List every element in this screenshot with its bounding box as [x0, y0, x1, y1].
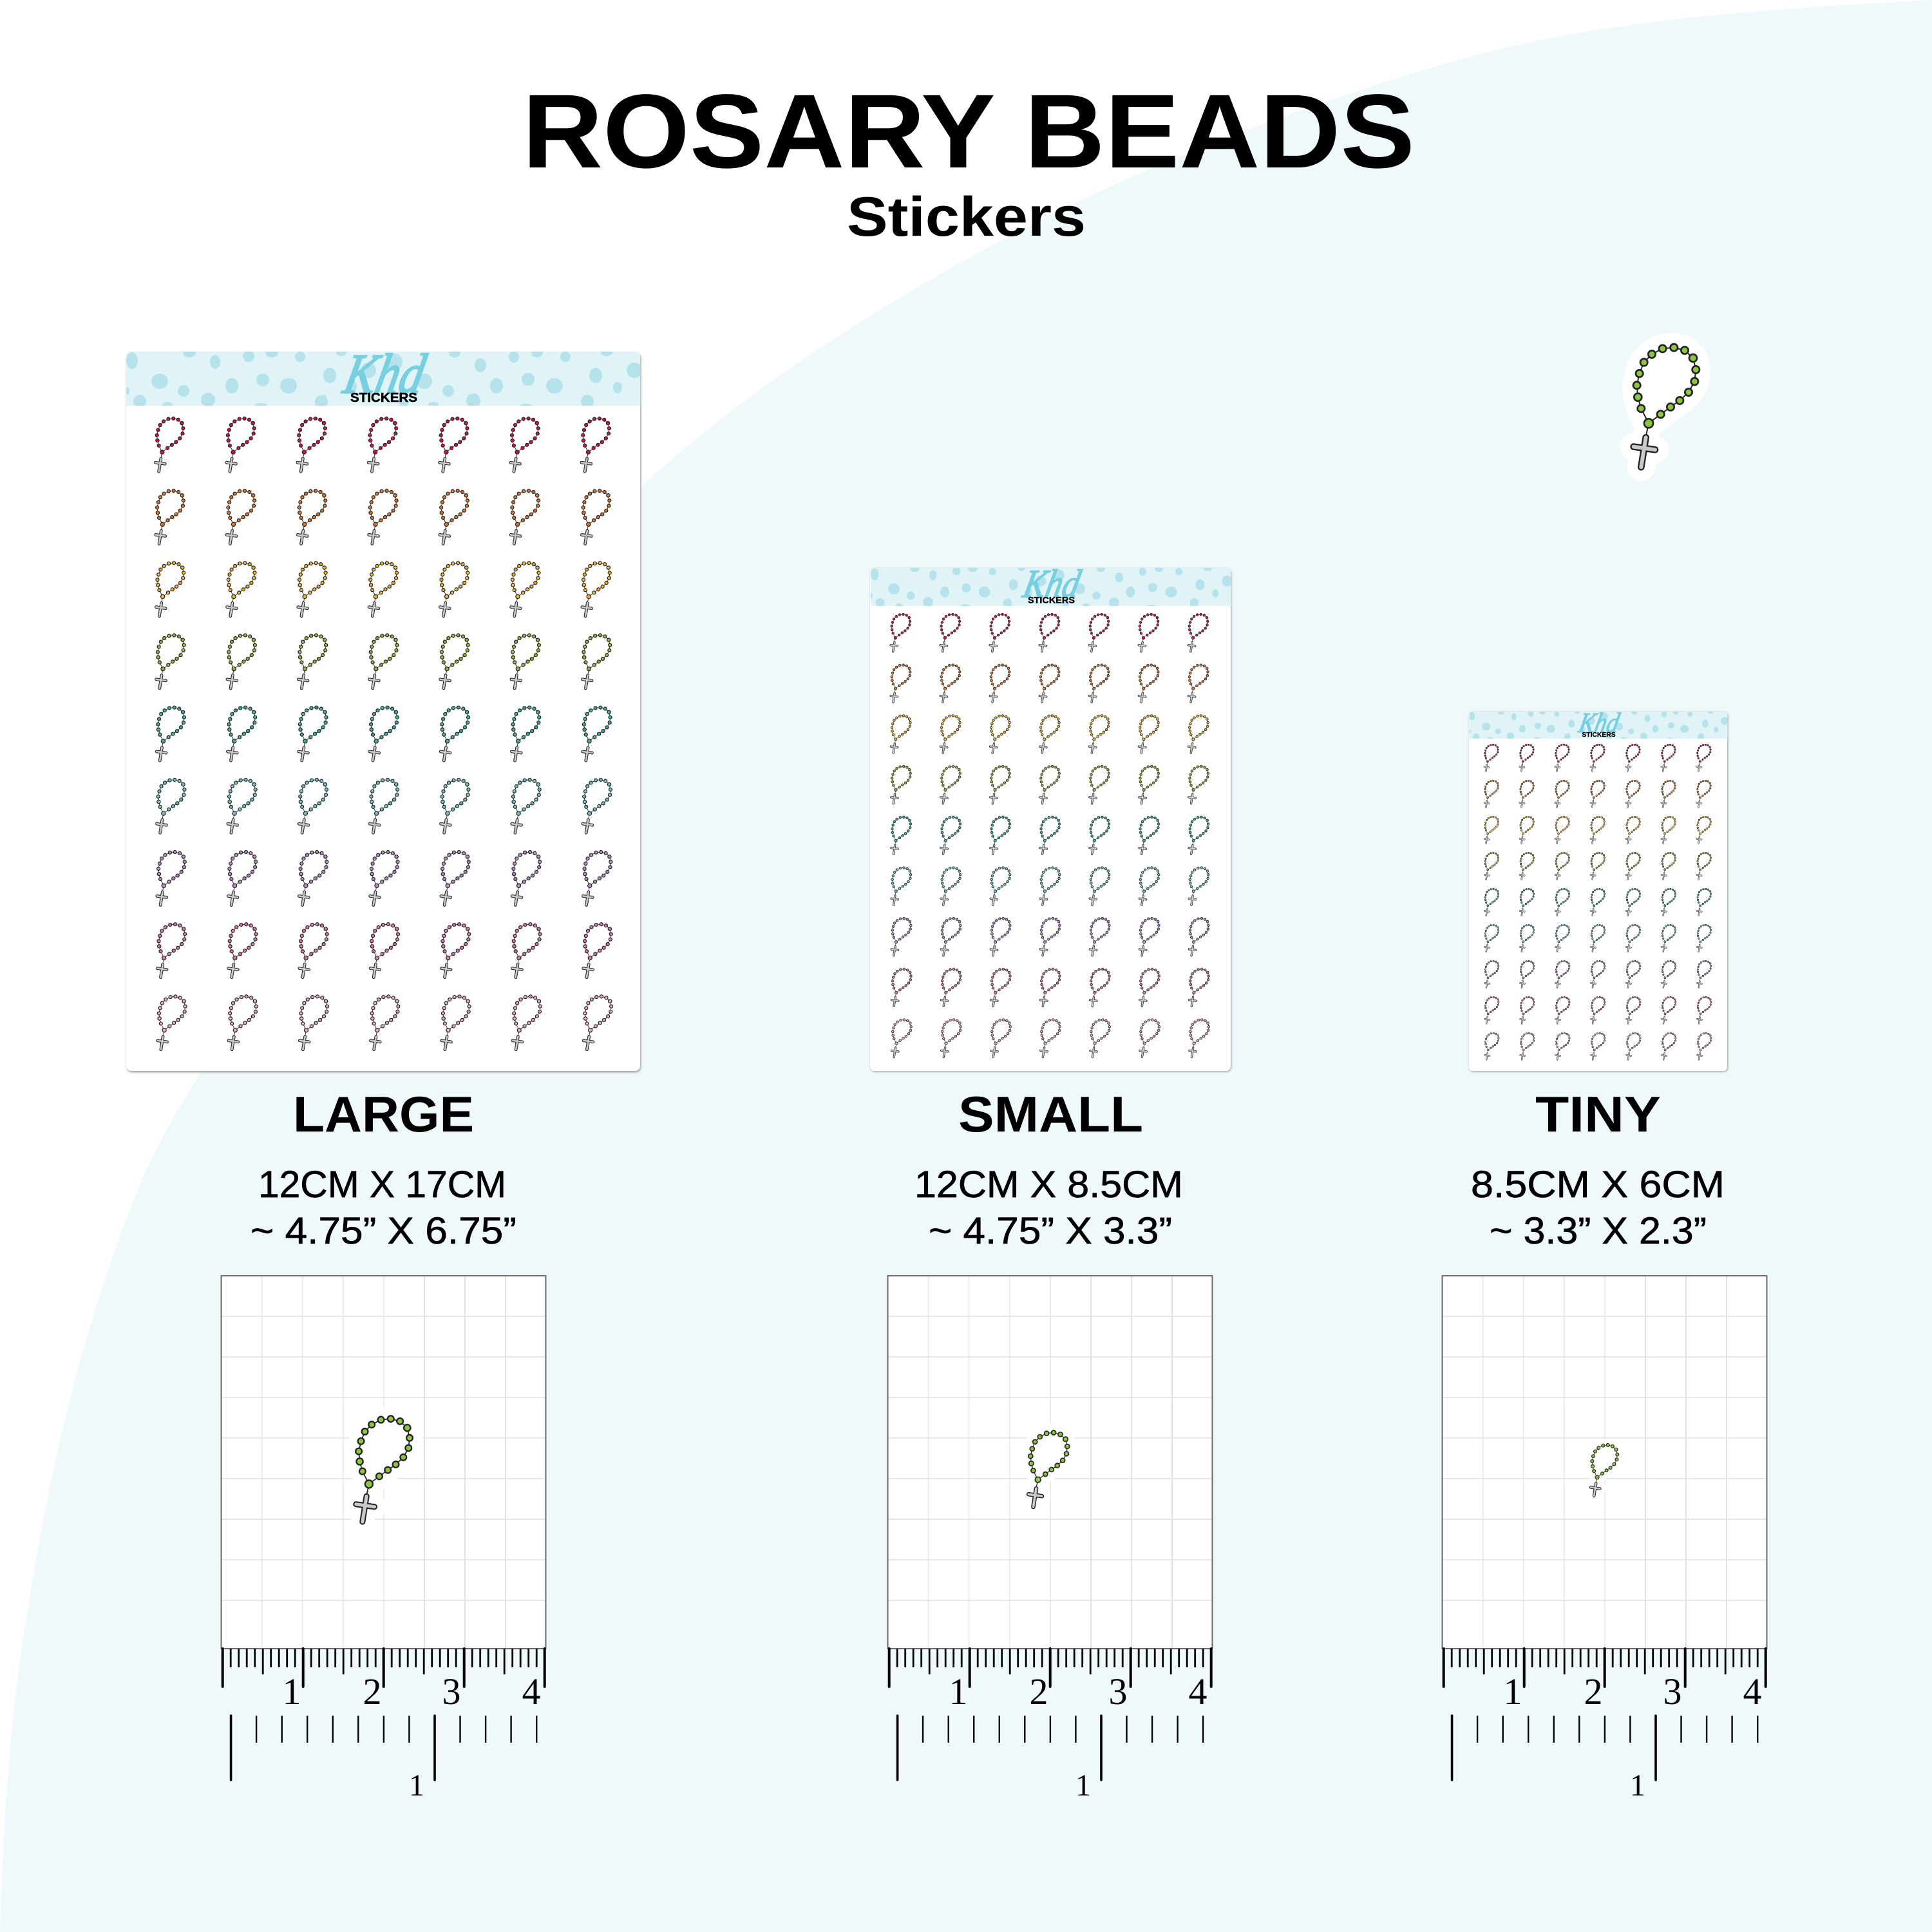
sheet header band with logo [870, 562, 1233, 609]
ruler numbers [1503, 1671, 1762, 1803]
ruler numbers: 2 [1029, 1671, 1048, 1712]
logo: Khd [1019, 562, 1084, 606]
sheet header band with logo [126, 343, 642, 410]
ruler numbers: 1 [949, 1671, 967, 1712]
rosary at large size [355, 1416, 413, 1522]
ruler numbers: 2 [1584, 1671, 1602, 1712]
ruler numbers: 3 [1663, 1671, 1682, 1712]
panel: tiny sticker sheet [1469, 707, 1728, 1072]
ruler numbers: 3 [442, 1671, 461, 1712]
sheet header band with logo [1469, 707, 1728, 741]
label: tiny: ~ 3.3” X 2.3” [1490, 1210, 1707, 1252]
ruler numbers [949, 1671, 1207, 1803]
size chart: small with rulers [887, 1276, 1212, 1803]
icon: green rosary sticker [1633, 344, 1700, 467]
ruler numbers: 4 [1743, 1671, 1762, 1712]
logo: Khd [337, 343, 431, 406]
label: tiny [1471, 1086, 1725, 1252]
ruler numbers [282, 1671, 541, 1803]
ruler numbers: 1 [1075, 1768, 1091, 1803]
logo: STICKERS [350, 391, 417, 405]
rosary sticker grid [1484, 744, 1712, 1059]
label: small: ~ 4.75” X 3.3” [929, 1210, 1172, 1252]
size chart: large with rulers [222, 1276, 546, 1803]
label: large: ~ 4.75” X 6.75” [251, 1210, 516, 1252]
ruler numbers: 3 [1109, 1671, 1127, 1712]
label: small [914, 1086, 1183, 1252]
label: small: SMALL [958, 1086, 1143, 1142]
panel: small sticker sheet [870, 562, 1233, 1072]
ruler numbers: 1 [1630, 1768, 1645, 1803]
ruler numbers: 1 [282, 1671, 301, 1712]
panel: large sticker sheet [126, 343, 642, 1072]
label: large [251, 1086, 516, 1252]
size chart: tiny with rulers [1443, 1276, 1767, 1803]
label: small: 12CM X 8.5CM [914, 1164, 1183, 1206]
ruler numbers: 4 [1189, 1671, 1207, 1712]
subtitle: Stickers [847, 186, 1086, 248]
rosary at tiny size [1591, 1443, 1619, 1496]
ruler numbers: 2 [363, 1671, 381, 1712]
ruler numbers: 4 [522, 1671, 541, 1712]
rosary at small size [1028, 1430, 1070, 1507]
label: tiny: TINY [1535, 1086, 1661, 1142]
logo: STICKERS [1028, 595, 1075, 605]
label: large: 12CM X 17CM [258, 1164, 506, 1206]
title: ROSARY BEADS [522, 72, 1415, 190]
logo: Khd [1576, 707, 1623, 739]
rosary sticker grid [155, 417, 613, 1050]
rosary sticker grid [891, 613, 1210, 1057]
label: large: LARGE [293, 1086, 474, 1142]
ruler numbers: 1 [409, 1768, 424, 1803]
label: tiny: 8.5CM X 6CM [1471, 1164, 1725, 1206]
logo: STICKERS [1582, 732, 1616, 739]
ruler numbers: 1 [1503, 1671, 1522, 1712]
